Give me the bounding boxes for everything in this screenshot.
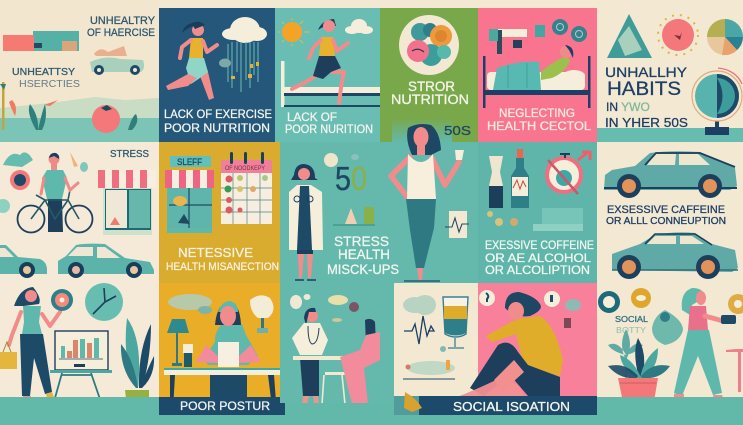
panel: bottom-left scene xyxy=(0,283,159,407)
label xyxy=(285,112,373,136)
icon: rain cloud xyxy=(219,17,267,92)
icon: cloud notes xyxy=(168,294,274,333)
figure: woman with bag xyxy=(0,287,60,406)
icon: person in bed xyxy=(483,45,590,108)
subheading: UNHEATTSY xyxy=(12,66,75,78)
subheading: HSERCTIES xyxy=(19,79,80,90)
figure: doctor xyxy=(289,164,323,280)
heading: OF HAERCISE xyxy=(87,27,155,39)
icon: table and stools xyxy=(293,356,378,404)
panel: title xyxy=(597,0,743,142)
icon: clock xyxy=(85,283,123,321)
heading xyxy=(87,15,156,39)
label: OR AE ALCOHOL xyxy=(485,253,592,265)
label: MISCK-UPS xyxy=(327,261,399,277)
panel: sleep and misanection xyxy=(159,142,280,283)
icon: glass xyxy=(183,344,193,367)
icon: car left xyxy=(0,245,47,278)
icon: car right xyxy=(58,244,154,278)
panel: doctor consultation xyxy=(280,283,394,404)
label: NEGLECTING xyxy=(499,108,575,120)
icon: pie chart xyxy=(707,19,743,55)
panel: stress scene xyxy=(0,142,159,283)
label: HEALTH xyxy=(338,246,390,262)
icon: cloud xyxy=(403,295,436,315)
panel: social isolation xyxy=(457,283,597,397)
label: STROR xyxy=(408,79,455,94)
panel: excessive coffee or alcohol xyxy=(478,142,597,283)
heading: UNHEALTRY xyxy=(90,15,156,27)
label: OR ALLL CONNEUPTION xyxy=(606,216,726,227)
label xyxy=(485,240,594,277)
icon: desk xyxy=(164,368,280,415)
floor xyxy=(0,397,743,425)
label: STRESS xyxy=(334,233,389,249)
heading: IN YHER 50S xyxy=(605,115,688,130)
icon: disc xyxy=(51,289,73,311)
icon: bed xyxy=(281,61,381,107)
heading xyxy=(605,64,688,130)
figure: walking woman xyxy=(670,288,736,403)
label: EXSESSIVE CAFFEINE xyxy=(607,204,725,216)
label bar: POOR POSTUR xyxy=(180,399,270,413)
panel: poor posture xyxy=(159,283,285,415)
icon: drink glass xyxy=(443,297,468,348)
chart: monitor with bars xyxy=(50,331,112,405)
icon: car bottom xyxy=(612,232,738,279)
icon: jar xyxy=(489,156,503,208)
label: NUTRITION xyxy=(391,92,469,107)
label xyxy=(164,109,272,135)
icon: triangle xyxy=(607,14,652,58)
heading: STRESS xyxy=(110,149,149,160)
label bar: social isolation: SOCIAL ISOATION xyxy=(453,400,570,414)
figure: doctor xyxy=(292,308,328,404)
panel: neglecting health xyxy=(478,8,597,142)
icon: sun xyxy=(278,18,310,46)
icon: sun badge xyxy=(658,15,698,55)
panel: top-left cream scene xyxy=(0,0,159,142)
icons: thought bubbles xyxy=(479,290,581,328)
label: LACK OF EXERCISE xyxy=(164,109,272,121)
figure: person at desk xyxy=(196,301,261,397)
label: LACK OF xyxy=(287,112,337,124)
icons: floating bits xyxy=(290,294,359,322)
icon: calendar xyxy=(221,152,272,224)
sign: SLEFF xyxy=(177,157,202,167)
icons: food bits xyxy=(324,153,375,225)
label: OR ALCOLIPTION xyxy=(485,265,590,277)
label: POOR NUTRITION xyxy=(164,123,270,135)
panel: lack of exercise runner xyxy=(159,8,275,142)
icon: car top xyxy=(604,151,737,198)
label xyxy=(166,245,279,273)
figure: runner xyxy=(292,19,348,103)
figure: man with bicycle xyxy=(18,153,92,232)
label xyxy=(487,108,592,133)
figure: seated woman xyxy=(457,292,563,397)
icon: shop window xyxy=(165,170,214,233)
blobs and decor xyxy=(0,152,88,213)
icon: globe xyxy=(692,68,742,135)
panel: cream with glass xyxy=(394,283,478,397)
label bar: social isolation xyxy=(394,392,597,415)
icon: cloud xyxy=(345,19,373,34)
panel: social scene xyxy=(597,283,743,407)
icon: food plate xyxy=(399,15,459,75)
icon: scattered pills xyxy=(487,211,518,226)
label xyxy=(391,79,469,107)
icon: side table xyxy=(726,349,743,392)
panel: caffeine and cars xyxy=(597,142,743,283)
icon: shelf and badges xyxy=(489,19,587,54)
subheading xyxy=(12,66,80,90)
label: SOCIAL xyxy=(615,315,649,324)
label xyxy=(327,233,399,277)
icon: potted plant xyxy=(608,338,670,407)
label xyxy=(606,204,726,227)
icon: heartbeat line xyxy=(404,316,434,344)
icon: plants xyxy=(0,82,137,130)
icon: bottle xyxy=(511,149,529,208)
icon: sofa xyxy=(533,208,583,231)
icon: no-sign xyxy=(547,152,590,194)
heading: UNHALLHY xyxy=(605,64,688,80)
icon: round leaf xyxy=(652,310,683,345)
sign xyxy=(170,156,211,167)
icon: heart monitor card xyxy=(445,211,469,238)
heading: IN YWO xyxy=(606,100,650,114)
number label: 50S xyxy=(444,123,471,138)
panel: teal runner on bed xyxy=(275,8,381,142)
label xyxy=(615,315,649,335)
icon: potted plant xyxy=(121,318,154,407)
label: EXESSIVE COFFEINE xyxy=(485,240,594,252)
figure: runner xyxy=(166,22,217,100)
figure: woman with cup xyxy=(391,124,464,281)
banner illustration xyxy=(3,31,79,51)
label: HEALTH MISANECTION xyxy=(166,261,279,273)
icon: tomato xyxy=(92,105,120,133)
label: BOTTY xyxy=(616,326,647,335)
icons: top badges xyxy=(598,288,743,314)
icon: shop xyxy=(98,170,156,235)
label: POOR NURITION xyxy=(285,124,373,136)
label: HEALTH CECTOL xyxy=(487,121,592,133)
icon: small car xyxy=(90,46,144,75)
icon: branch plant xyxy=(608,329,643,395)
panel: nutrition xyxy=(380,8,478,142)
panel: stress health check-ups xyxy=(280,124,478,283)
icon: calendar: OF NOODKEPY xyxy=(225,166,265,172)
figure: patient xyxy=(340,319,380,404)
icon: lamp xyxy=(167,319,189,366)
icon: leaves and pill xyxy=(403,346,455,379)
label: NETESSIVE xyxy=(178,245,253,260)
heading: HABITS xyxy=(607,79,681,100)
number: 50 xyxy=(335,160,367,197)
